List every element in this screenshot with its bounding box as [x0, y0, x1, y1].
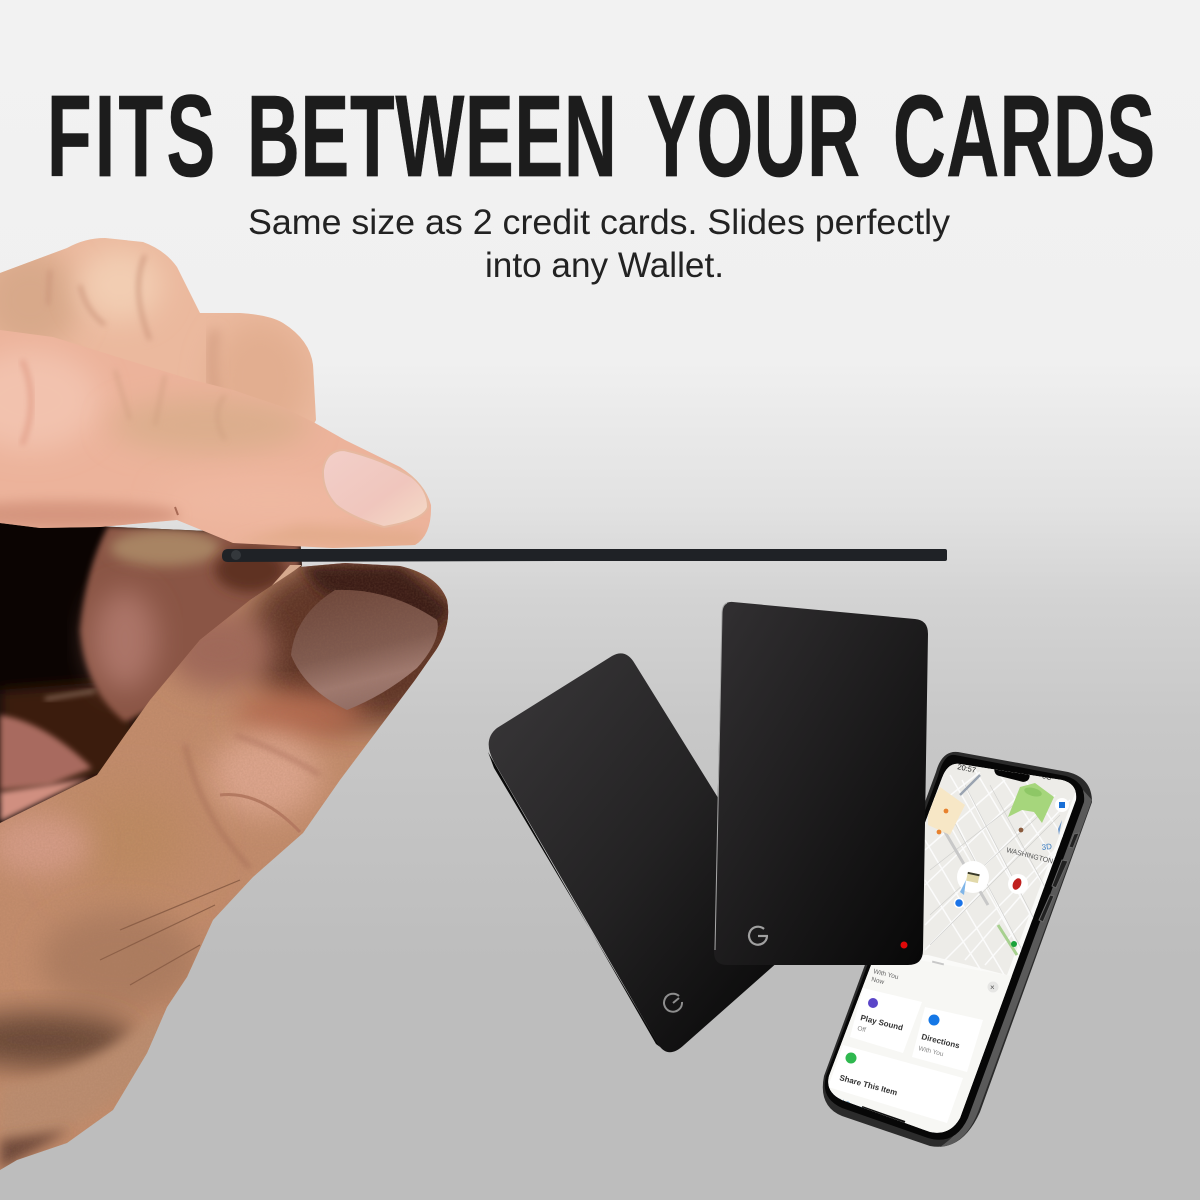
title: FITS: [47, 71, 215, 201]
map: [922, 764, 1076, 975]
car pin: [1008, 874, 1028, 894]
map control buttons: 3D: [1041, 842, 1053, 852]
park: [1008, 783, 1054, 823]
left tilted card: [488, 653, 805, 1052]
phone: [815, 752, 1092, 1147]
screen: 20:57: [957, 762, 977, 775]
screen: 5G: [1042, 773, 1052, 782]
hand holding card: [0, 230, 475, 1180]
dynamic island: [994, 770, 1030, 782]
play sound tile: [850, 988, 922, 1053]
back finger knuckle: [0, 238, 316, 423]
phone body: [823, 752, 1092, 1147]
home indicator: [862, 1107, 905, 1122]
title: YOUR: [647, 71, 860, 201]
green transit pin: [1011, 941, 1017, 947]
directions tile: [912, 1007, 983, 1072]
map control buttons: [1041, 798, 1069, 852]
map labels: WASHINGTON: [1006, 847, 1054, 866]
tracker pin: [957, 861, 989, 893]
thumb nail: [291, 590, 438, 710]
index fingernail: [323, 450, 428, 527]
skin texture: [0, 564, 448, 1044]
commercial area: [928, 787, 965, 835]
share tile: [828, 1045, 963, 1123]
screen: ×: [990, 983, 995, 992]
subtitle: [248, 203, 951, 285]
bottom sheet: [828, 965, 1012, 1133]
logo on right card: [749, 927, 768, 945]
title: CARDS: [893, 71, 1155, 201]
index finger: [0, 330, 431, 548]
middle and ring fingers in shadow: [0, 522, 310, 832]
logo on left card: [664, 994, 682, 1012]
sheet header: With You: [873, 968, 899, 981]
play sound tile: Play Sound: [860, 1013, 904, 1033]
directions tile: With You: [918, 1045, 944, 1058]
map roads: [925, 770, 1085, 985]
title: BETWEEN: [247, 71, 617, 201]
subtitle: into any Wallet.: [485, 246, 724, 285]
directions tile: Directions: [921, 1032, 961, 1051]
subtitle: Same size as 2 credit cards. Slides perfectly: [248, 203, 951, 242]
share tile: Add Person: [830, 1096, 867, 1114]
right upright card: [714, 602, 928, 965]
screen: [828, 764, 1076, 1133]
user location: [954, 880, 966, 908]
play sound tile: Off: [857, 1025, 867, 1034]
close button: [988, 982, 998, 992]
red status light: [900, 942, 908, 948]
flat card side view: [222, 549, 947, 562]
title: [47, 71, 1155, 201]
share tile: Share This Item: [838, 1073, 898, 1097]
thumb and palm: [0, 555, 475, 1180]
sheet header: Now: [871, 976, 885, 986]
side buttons: [1039, 833, 1079, 922]
